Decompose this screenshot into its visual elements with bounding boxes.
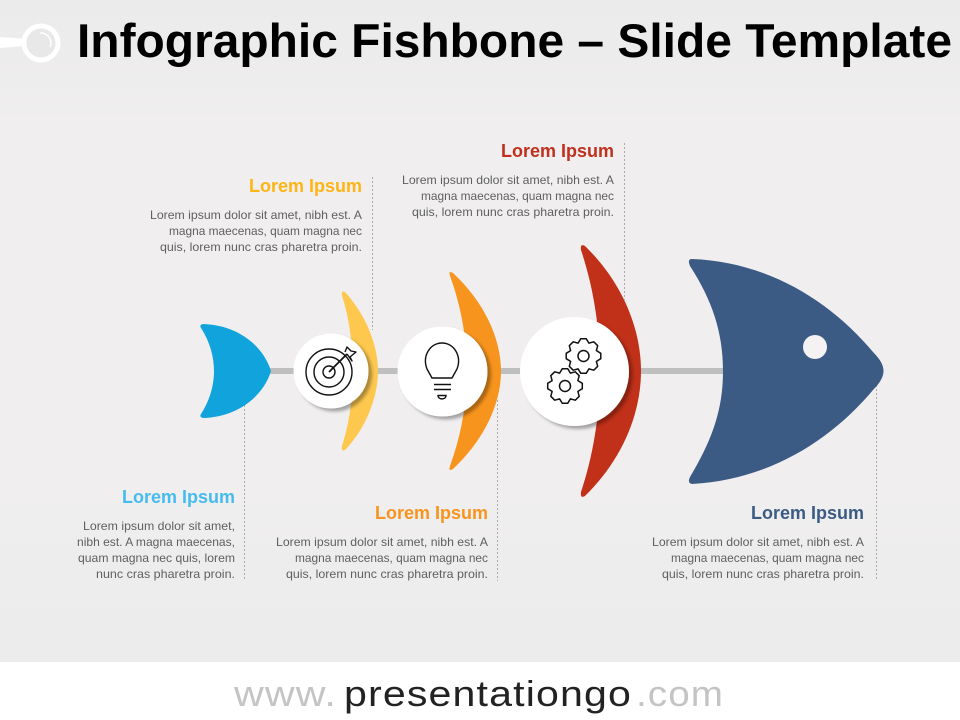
text block: yellow: quis, lorem nunc cras pharetra proin. — [160, 240, 362, 254]
text block: navy: magna maecenas, quam magna nec — [671, 551, 864, 565]
footer url — [233, 673, 724, 714]
bone: yellow — [342, 292, 378, 450]
text block: orange — [276, 502, 488, 581]
text block: red: quis, lorem nunc cras pharetra proin. — [412, 205, 614, 219]
icon: target — [294, 334, 368, 408]
text block: red — [402, 140, 614, 219]
text block: navy — [652, 502, 864, 581]
text block: red: Lorem Ipsum — [501, 140, 614, 161]
head: navy — [689, 259, 884, 484]
footer url: .com — [636, 673, 724, 714]
text block: blue: quam magna nec quis, lorem — [78, 551, 235, 565]
tail: blue — [200, 324, 271, 418]
text block: red: magna maecenas, quam magna nec — [421, 189, 614, 203]
text block: blue: Lorem ipsum dolor sit amet, — [83, 519, 235, 533]
text block: blue: Lorem Ipsum — [122, 486, 235, 507]
text block: blue: nunc cras pharetra proin. — [96, 567, 235, 581]
text block: orange: magna maecenas, quam magna nec — [295, 551, 488, 565]
footer url: www. — [233, 673, 337, 714]
icon: light bulb — [398, 326, 488, 416]
text block: navy: Lorem ipsum dolor sit amet, nibh est. A — [652, 535, 864, 549]
footer band — [0, 662, 960, 720]
text block: navy: Lorem Ipsum — [751, 502, 864, 523]
text block: yellow: magna maecenas, quam magna nec — [169, 224, 362, 238]
text block: red: Lorem ipsum dolor sit amet, nibh est. A — [402, 173, 614, 187]
title: Infographic Fishbone – Slide Template — [77, 14, 952, 67]
dashed leader lines — [244, 143, 876, 581]
text block: yellow: Lorem ipsum dolor sit amet, nibh est. A — [150, 208, 362, 222]
text block: yellow: Lorem Ipsum — [249, 175, 362, 196]
fish eye — [803, 335, 827, 359]
text block: orange: Lorem ipsum dolor sit amet, nibh est. A — [276, 535, 488, 549]
spine — [268, 368, 726, 374]
text block: navy: quis, lorem nunc cras pharetra proin. — [662, 567, 864, 581]
icon: gears — [520, 317, 629, 426]
text block: yellow — [150, 175, 362, 254]
text block: blue: nibh est. A magna maecenas, — [77, 535, 235, 549]
text block: blue — [77, 486, 235, 581]
text block: orange: Lorem Ipsum — [375, 502, 488, 523]
footer url: presentationgo — [344, 673, 632, 714]
bone: red — [581, 245, 641, 497]
fishbone diagram — [200, 143, 884, 581]
text block: orange: quis, lorem nunc cras pharetra proin. — [286, 567, 488, 581]
icon: logo magnifier — [0, 26, 58, 60]
bone: orange — [449, 272, 501, 470]
